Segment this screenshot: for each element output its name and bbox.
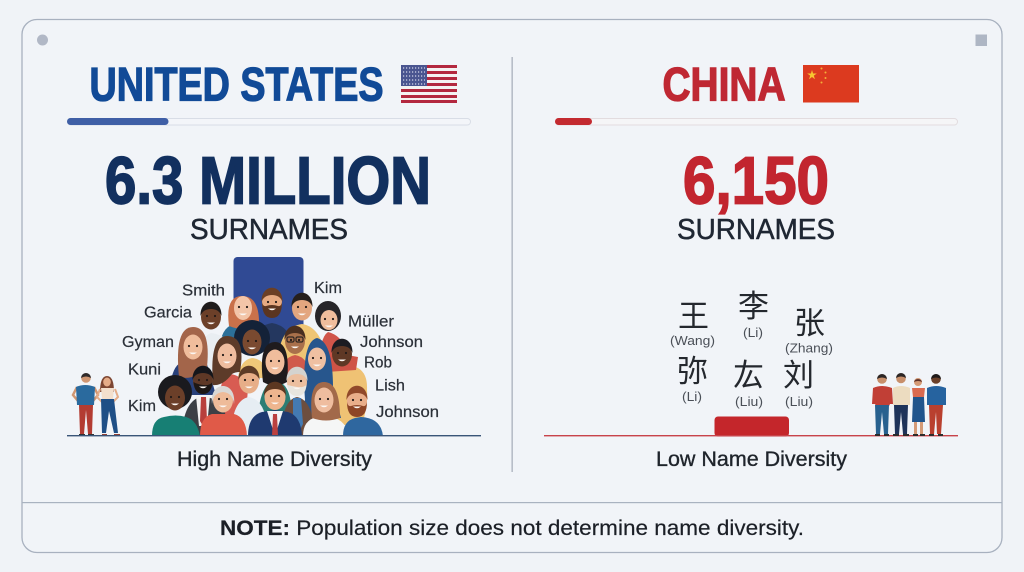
chinese surnames: 弥 xyxy=(677,346,708,391)
chinese surnames: (Zhang) xyxy=(785,340,833,356)
small group of people xyxy=(872,373,946,435)
person: man with glasses xyxy=(279,326,311,379)
surname labels: Johnson xyxy=(360,334,423,351)
label: surnames: SURNAMES xyxy=(190,214,348,246)
surname labels: Johnson xyxy=(376,404,439,421)
progress bar: China xyxy=(555,118,958,125)
heading: United States: UNITED STATES xyxy=(90,58,384,110)
surname labels: Lish xyxy=(375,378,405,394)
person: front woman in white xyxy=(303,382,348,436)
progress bar: US xyxy=(67,118,470,125)
statistic: 6.3 million: 6.3 MILLION xyxy=(105,144,431,218)
chinese surnames: (Li) xyxy=(743,325,763,340)
person: front man in navy suit xyxy=(248,382,302,436)
person: woman in hijab xyxy=(297,338,341,418)
chinese surnames: 王 xyxy=(678,291,709,336)
surname labels: Kuni xyxy=(128,362,161,378)
surname labels: Kim xyxy=(128,398,156,415)
person: man in dark suit xyxy=(182,366,227,436)
surname labels: Müller xyxy=(348,314,394,330)
person 1 xyxy=(872,374,893,435)
person 4 xyxy=(927,374,946,435)
person: bearded man xyxy=(252,288,294,350)
person 2 xyxy=(893,373,910,435)
surname labels: Smith xyxy=(182,282,225,300)
corner square xyxy=(976,34,987,46)
chinese surnames: 张 xyxy=(794,298,825,343)
person: front older woman xyxy=(200,386,247,436)
person 3 xyxy=(912,378,925,435)
person: orange-haired woman xyxy=(220,296,264,345)
icon: China flag xyxy=(803,65,859,102)
person: man in yellow xyxy=(278,293,327,362)
person: small standing man xyxy=(73,373,98,435)
chinese surnames: (Li) xyxy=(682,389,702,404)
panel: China xyxy=(544,58,958,471)
icon: US flag xyxy=(401,65,457,103)
caption: low name diversity: Low Name Diversity xyxy=(656,448,848,471)
person: man in white shirt xyxy=(196,302,238,375)
chinese surnames xyxy=(670,281,833,409)
person: front bearded man in blue xyxy=(343,386,383,436)
person: woman with long brown hair xyxy=(170,327,216,395)
surname labels: Kim xyxy=(314,280,342,297)
person: woman with afro xyxy=(234,320,270,378)
person: older man with tie xyxy=(281,367,315,436)
person: woman in teal xyxy=(257,342,291,436)
person: small standing woman xyxy=(97,376,120,435)
person: woman with brown hair xyxy=(212,336,248,436)
surname labels xyxy=(122,280,439,421)
label: surnames: SURNAMES xyxy=(677,214,835,246)
chinese surnames: 李 xyxy=(738,281,769,326)
statistic: 6,150: 6,150 xyxy=(683,144,829,218)
panel: United States xyxy=(67,58,481,471)
person: man in light shirt xyxy=(231,366,268,436)
chinese surnames: 刘 xyxy=(783,350,814,395)
illustration: crowd of people xyxy=(73,257,383,436)
corner dot xyxy=(37,34,48,46)
person: man in yellow shirt xyxy=(325,339,367,425)
heading: China: CHINA xyxy=(662,58,786,110)
person: woman with black hair xyxy=(315,301,353,368)
chinese surnames: 厷 xyxy=(733,350,764,395)
chinese surnames: (Wang) xyxy=(670,333,715,348)
chinese surnames: (Liu) xyxy=(735,394,763,409)
surname labels: Gyman xyxy=(122,334,174,351)
person: front woman with afro xyxy=(152,375,200,436)
footer note: NOTE: Population size does not determine name diversity. xyxy=(220,516,804,540)
blue backdrop block xyxy=(234,257,304,337)
chinese surnames: (Liu) xyxy=(785,394,813,409)
red block xyxy=(714,416,789,436)
caption: high name diversity: High Name Diversity xyxy=(177,448,372,471)
surname labels: Garcia xyxy=(144,304,192,322)
surname labels: Rob xyxy=(364,354,392,372)
